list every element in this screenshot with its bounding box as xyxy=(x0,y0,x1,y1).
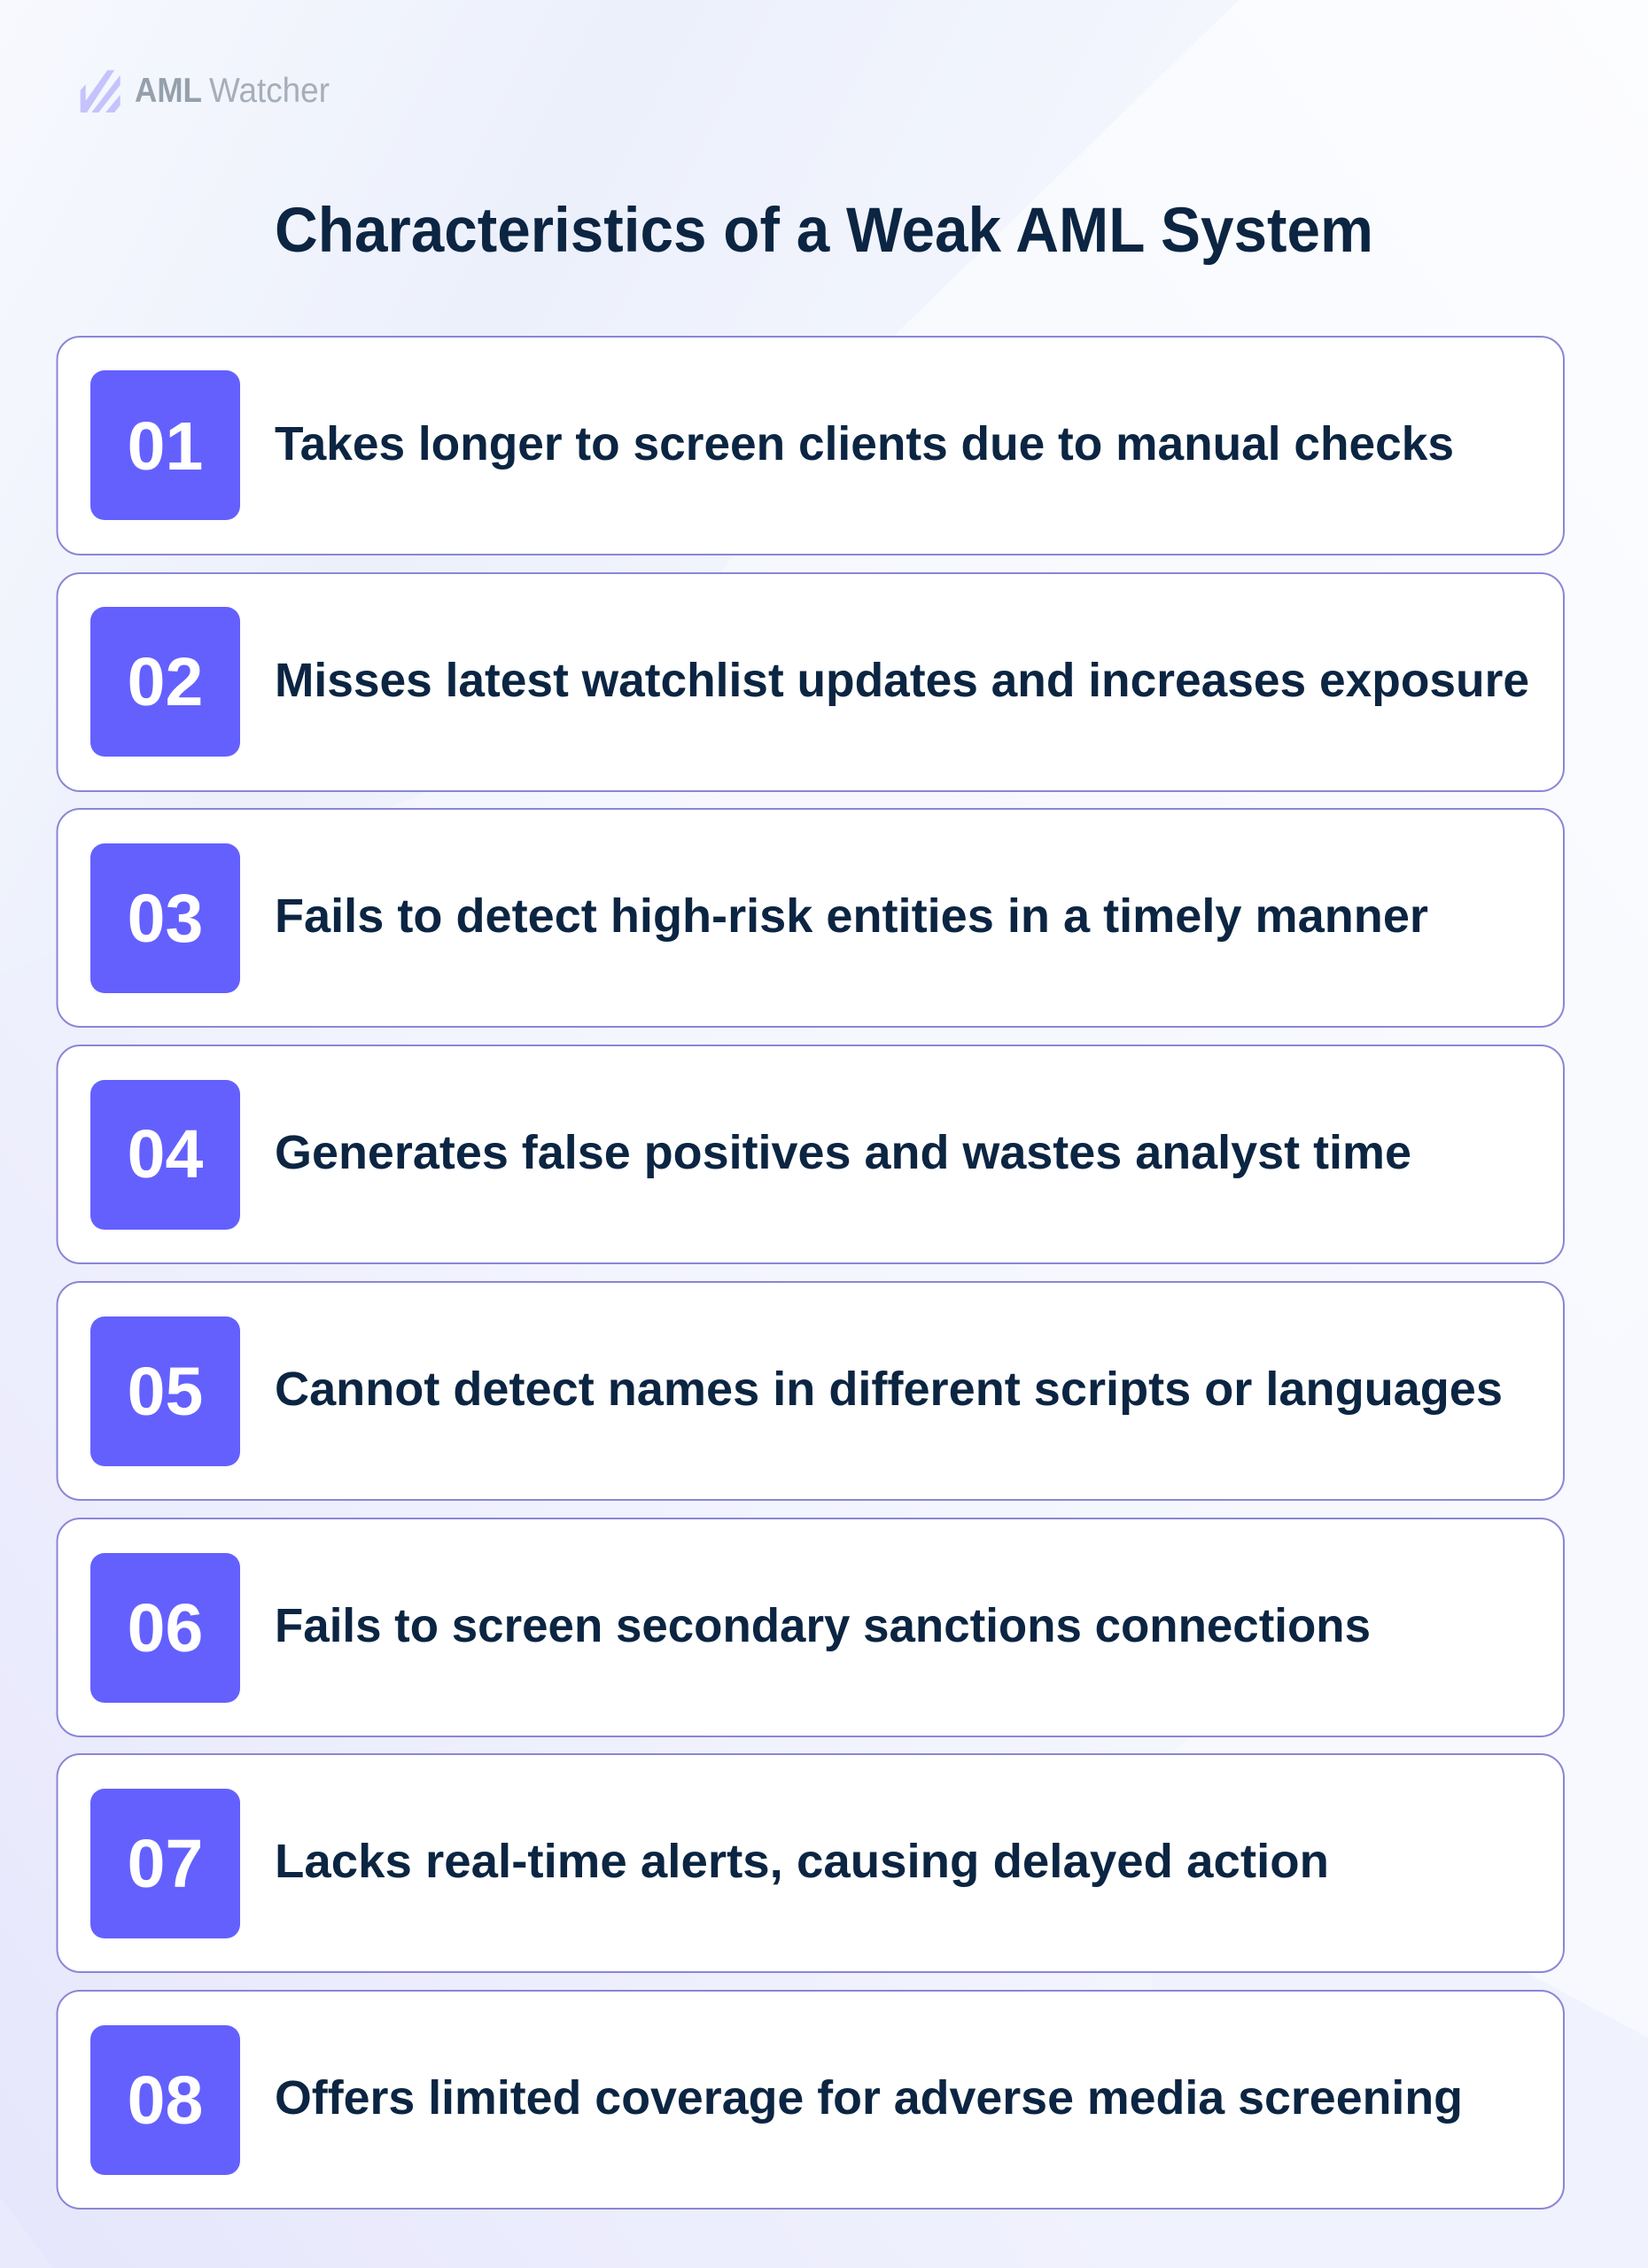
badge 04: 04 xyxy=(128,1116,203,1192)
badge 03: 03 xyxy=(128,881,203,957)
item text 04: Generates false positives and wastes analyst time xyxy=(275,1126,1411,1179)
panel: item 04 xyxy=(57,1045,1564,1263)
badge 02: 02 xyxy=(128,644,203,720)
panel: item 06 xyxy=(57,1518,1564,1736)
panel: item 05 xyxy=(57,1282,1564,1500)
badge 02 xyxy=(90,607,240,757)
item text 03: Fails to detect high-risk entities in a timely manner xyxy=(275,889,1428,943)
logo wordmark: Watcher: Watcher xyxy=(209,72,330,110)
logo wordmark: AML: AML xyxy=(135,72,202,110)
badge 05 xyxy=(90,1317,240,1466)
item text 02: Misses latest watchlist updates and increases exposure xyxy=(275,654,1529,707)
badge 06 xyxy=(90,1553,240,1703)
badge 08: 08 xyxy=(128,2062,203,2139)
item text 06: Fails to screen secondary sanctions connections xyxy=(275,1599,1371,1652)
title: Characteristics of a Weak AML System xyxy=(275,196,1373,266)
badge 05: 05 xyxy=(128,1354,203,1430)
badge 01: 01 xyxy=(128,408,203,485)
item text 08: Offers limited coverage for adverse media screening xyxy=(275,2071,1463,2124)
panel: item 01 xyxy=(57,337,1564,555)
icon: logo stripes xyxy=(81,70,120,113)
logo xyxy=(81,70,330,113)
badge 04 xyxy=(90,1080,240,1230)
badge 07 xyxy=(90,1789,240,1938)
badge 03 xyxy=(90,843,240,993)
panel: item 03 xyxy=(57,809,1564,1027)
badge 01 xyxy=(90,370,240,520)
badge 06: 06 xyxy=(128,1590,203,1666)
item text 05: Cannot detect names in different scripts or languages xyxy=(275,1363,1503,1416)
item text 01: Takes longer to screen clients due to manual checks xyxy=(275,417,1454,470)
panel: item 02 xyxy=(57,573,1564,791)
panel: item 07 xyxy=(57,1754,1564,1972)
panel: item 08 xyxy=(57,1991,1564,2209)
badge 07: 07 xyxy=(128,1826,203,1902)
item text 07: Lacks real-time alerts, causing delayed action xyxy=(275,1835,1329,1888)
badge 08 xyxy=(90,2025,240,2175)
